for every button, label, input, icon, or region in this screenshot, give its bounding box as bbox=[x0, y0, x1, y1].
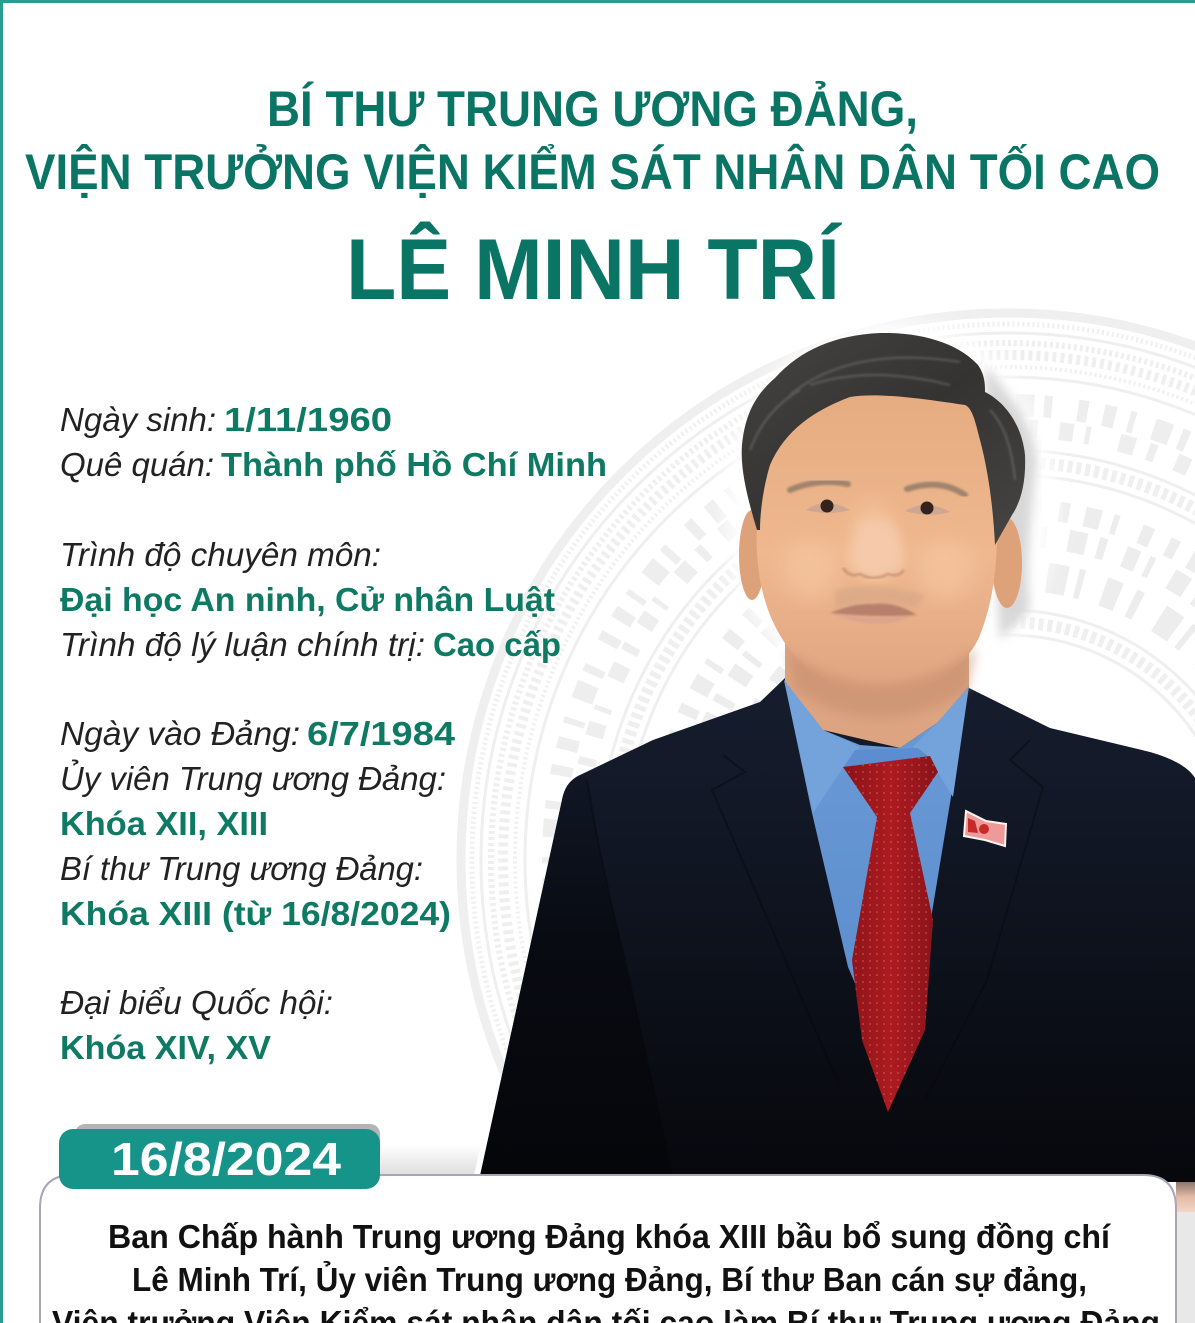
cheek highlights bbox=[782, 500, 973, 600]
announcement line 1: Ban Chấp hành Trung ương Đảng khóa XIII bầu bổ sung đồng chí bbox=[108, 1218, 1112, 1255]
shirt inner fold bbox=[843, 748, 930, 768]
portrait bbox=[480, 320, 1195, 1182]
eyebrows bbox=[790, 482, 965, 495]
title line 1: BÍ THƯ TRUNG ƯƠNG ĐẢNG, bbox=[267, 81, 918, 137]
shirt collar left bbox=[784, 680, 860, 813]
announcement card bbox=[40, 1175, 1176, 1323]
party entry date: Ngày vào Đảng: bbox=[60, 715, 300, 752]
eyes bbox=[806, 500, 950, 515]
left sleeve bbox=[480, 775, 673, 1176]
face bbox=[757, 385, 997, 693]
secretariat: Khóa XIII (từ 16/8/2024) bbox=[60, 895, 451, 932]
education: Đại học An ninh, Cử nhân Luật bbox=[60, 581, 555, 618]
head shadow bbox=[985, 365, 1036, 640]
education bbox=[60, 536, 555, 618]
shirt collar right bbox=[913, 686, 969, 797]
announcement line 2: Lê Minh Trí, Ủy viên Trung ương Đảng, Bí thư Ban cán sự đảng, bbox=[132, 1261, 1087, 1298]
hair bbox=[742, 333, 1025, 545]
suit bbox=[480, 678, 1195, 1182]
bottom right strip bbox=[1176, 1212, 1195, 1323]
hair highlights bbox=[750, 358, 1015, 480]
head glow bbox=[725, 320, 1055, 700]
date badge bbox=[59, 1124, 380, 1189]
party entry date: 6/7/1984 bbox=[307, 715, 456, 752]
national assembly bbox=[60, 984, 333, 1066]
secretariat: Bí thư Trung ương Đảng: bbox=[60, 850, 423, 887]
education: Trình độ chuyên môn: bbox=[60, 536, 381, 573]
biography text bbox=[60, 401, 607, 1066]
peach edge bbox=[1176, 1182, 1195, 1212]
central committee: Ủy viên Trung ương Đảng: bbox=[60, 759, 446, 797]
shirt bbox=[784, 680, 969, 1060]
nose shadow bbox=[843, 568, 904, 578]
home town: Thành phố Hồ Chí Minh bbox=[221, 446, 607, 483]
party entry date bbox=[60, 715, 456, 752]
mouth bbox=[830, 603, 917, 624]
badge date: 16/8/2024 bbox=[111, 1133, 341, 1185]
birth date bbox=[60, 401, 392, 438]
national assembly: Khóa XIV, XV bbox=[60, 1029, 271, 1066]
home town bbox=[60, 446, 607, 483]
secretariat bbox=[60, 850, 451, 932]
bronze drum background pattern bbox=[461, 313, 1195, 1323]
necktie bbox=[843, 756, 938, 1112]
badge body bbox=[59, 1129, 380, 1189]
national assembly: Đại biểu Quốc hội: bbox=[60, 984, 333, 1021]
political level: Trình độ lý luận chính trị: bbox=[60, 626, 425, 663]
title bbox=[25, 81, 1160, 318]
political level: Cao cấp bbox=[433, 626, 561, 663]
central committee: Khóa XII, XIII bbox=[60, 805, 268, 842]
name: LÊ MINH TRÍ bbox=[346, 222, 842, 318]
badge shadow tab bbox=[75, 1124, 380, 1154]
lapel edges bbox=[587, 740, 1043, 1176]
birth date: 1/11/1960 bbox=[224, 401, 392, 438]
ears bbox=[739, 510, 1022, 608]
card box bbox=[40, 1175, 1176, 1323]
neck bbox=[785, 640, 969, 748]
birth date: Ngày sinh: bbox=[60, 401, 216, 438]
chin shadow bbox=[787, 647, 977, 718]
tie dots bbox=[843, 756, 938, 1112]
central committee bbox=[60, 759, 446, 842]
nose bbox=[848, 520, 903, 578]
party pin bbox=[964, 811, 1006, 846]
moustache shading bbox=[835, 586, 925, 608]
home town: Quê quán: bbox=[60, 446, 214, 483]
shadow above card bbox=[380, 1145, 481, 1175]
